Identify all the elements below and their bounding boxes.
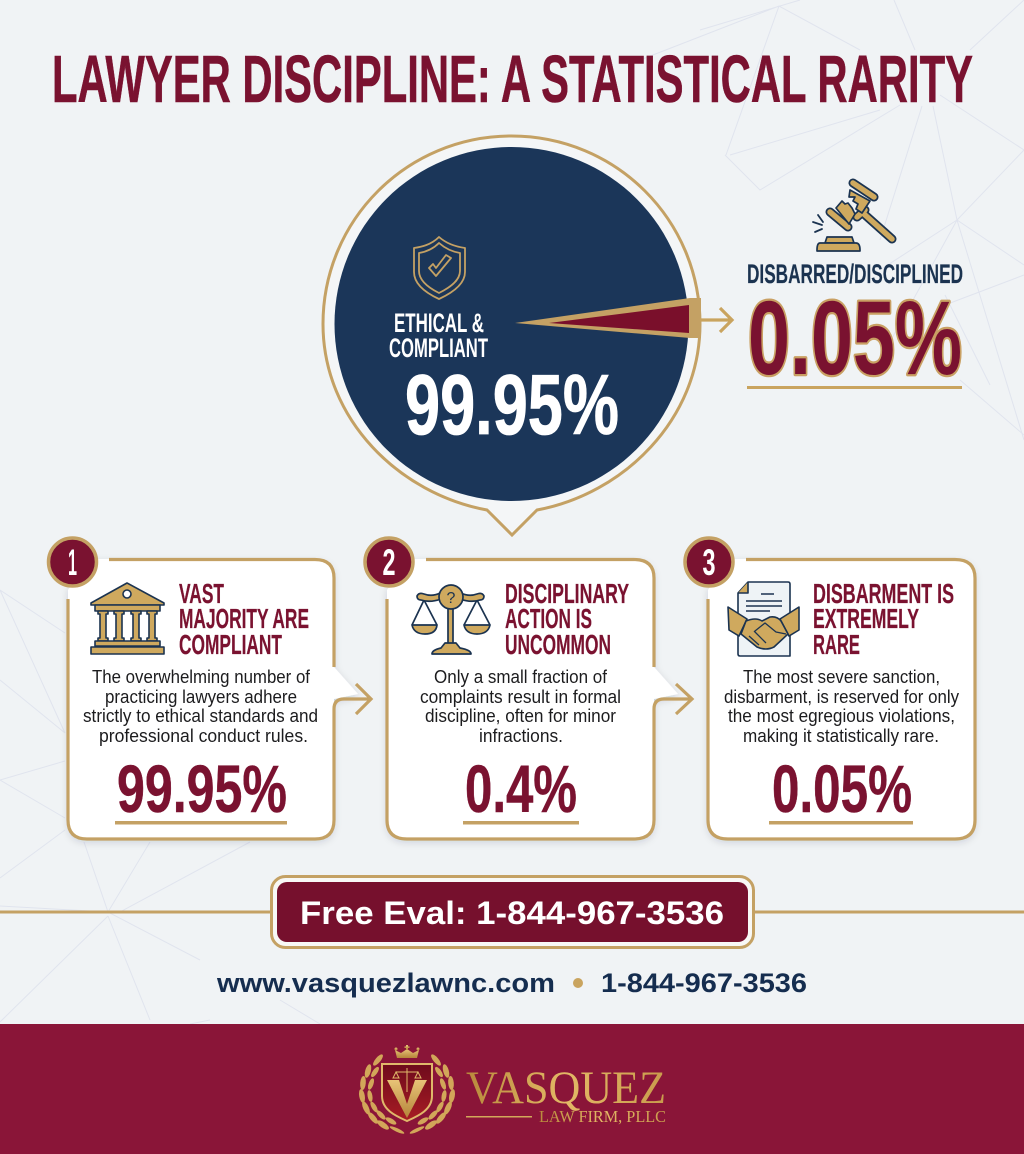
card 3 background bbox=[708, 559, 975, 839]
pie navy segment bbox=[334, 147, 688, 501]
number badge 1 bbox=[48, 538, 96, 586]
pie chart: 99.95 vs 0.05 percent bbox=[323, 136, 701, 535]
icon: courthouse bbox=[91, 583, 164, 654]
body text 3 bbox=[724, 667, 959, 746]
heading 1: MAJORITY ARE bbox=[179, 603, 309, 634]
heading 3 bbox=[813, 578, 954, 660]
contact line bbox=[216, 968, 807, 998]
number badge 3 bbox=[685, 538, 733, 586]
heading 3: RARE bbox=[813, 629, 860, 660]
heading 1 bbox=[179, 578, 309, 660]
body text 2: discipline, often for minor bbox=[425, 706, 616, 726]
number badge 1: 1 bbox=[68, 542, 77, 583]
icon: scales with question mark bbox=[412, 585, 490, 654]
logo wordmark: VASQUEZ bbox=[466, 1062, 666, 1114]
body text 2: infractions. bbox=[479, 726, 563, 746]
heading 1: COMPLIANT bbox=[179, 629, 282, 660]
pie red wedge bbox=[515, 298, 701, 338]
wreath left branch bbox=[358, 1053, 405, 1135]
pie outer ring with pointer bbox=[323, 136, 700, 535]
body text 2: Only a small fraction of bbox=[434, 667, 608, 687]
number badge 2: 2 bbox=[382, 542, 396, 583]
arrow: wedge to callout bbox=[700, 308, 732, 332]
body text 1: strictly to ethical standards and bbox=[83, 706, 318, 726]
body text 1: The overwhelming number of bbox=[92, 667, 311, 687]
body text 1: professional conduct rules. bbox=[99, 726, 308, 746]
card 2 background bbox=[387, 559, 692, 839]
panel: card 1 compliant bbox=[48, 538, 371, 839]
body text 3: disbarment, is reserved for only bbox=[724, 687, 959, 707]
label: ethical and compliant: ETHICAL & bbox=[394, 308, 484, 338]
number badge 3: 3 bbox=[702, 542, 716, 583]
card 1 background bbox=[68, 559, 371, 839]
icon: contract and handshake bbox=[728, 582, 799, 656]
stat 1 underline bbox=[115, 821, 287, 824]
body text 2: complaints result in formal bbox=[420, 687, 621, 707]
body text 3: The most severe sanction, bbox=[743, 667, 940, 687]
body text 2 bbox=[420, 667, 621, 746]
body text 3: the most egregious violations, bbox=[728, 706, 955, 726]
body text 1: practicing lawyers adhere bbox=[105, 687, 297, 707]
panel: card 3 rare bbox=[685, 538, 975, 839]
stat 2: 0.4% bbox=[465, 752, 577, 827]
logo wreath bbox=[358, 1053, 456, 1135]
value: 99.95 percent: 99.95% bbox=[405, 358, 619, 453]
call to action button: Free Eval: 1-844-967-3536 bbox=[300, 895, 724, 931]
label: ethical and compliant: COMPLIANT bbox=[389, 333, 488, 363]
wreath right branch bbox=[409, 1053, 456, 1135]
heading 2: DISCIPLINARY bbox=[505, 578, 629, 609]
heading 3: DISBARMENT IS bbox=[813, 578, 954, 609]
body text 1 bbox=[83, 667, 318, 746]
stat 3 underline bbox=[769, 821, 913, 824]
call to action button bbox=[272, 876, 754, 948]
contact line: www.vasquezlawnc.com bbox=[216, 968, 555, 998]
callout: disbarred or disciplined bbox=[747, 183, 963, 397]
logo: Vasquez Law Firm bbox=[358, 1045, 666, 1135]
heading 2: UNCOMMON bbox=[505, 629, 611, 660]
number badge 2 bbox=[365, 538, 413, 586]
stat 2 underline bbox=[463, 821, 579, 824]
heading 2 bbox=[505, 578, 629, 660]
logo shield bbox=[382, 1064, 432, 1121]
logo subtitle: LAW FIRM, PLLC bbox=[539, 1107, 666, 1126]
contact line: 1-844-967-3536 bbox=[601, 968, 807, 998]
heading 3: EXTREMELY bbox=[813, 603, 919, 634]
body text 3: making it statistically rare. bbox=[743, 726, 939, 746]
logo crown bbox=[394, 1045, 420, 1058]
stat 1: 99.95% bbox=[117, 752, 287, 827]
icon: scales with question mark: ? bbox=[447, 590, 456, 607]
footer band bbox=[0, 1024, 1024, 1154]
stat 3: 0.05% bbox=[772, 752, 912, 827]
panel: card 2 uncommon bbox=[365, 538, 692, 839]
heading 2: ACTION IS bbox=[505, 603, 592, 634]
divider line with call to action bbox=[0, 876, 1024, 948]
logo rule bbox=[466, 1116, 532, 1118]
icon: shield with check bbox=[414, 237, 465, 299]
icon: broken gavel bbox=[813, 183, 892, 251]
callout underline bbox=[747, 386, 962, 389]
label: ethical and compliant bbox=[389, 308, 488, 363]
heading 1: VAST bbox=[179, 578, 224, 609]
